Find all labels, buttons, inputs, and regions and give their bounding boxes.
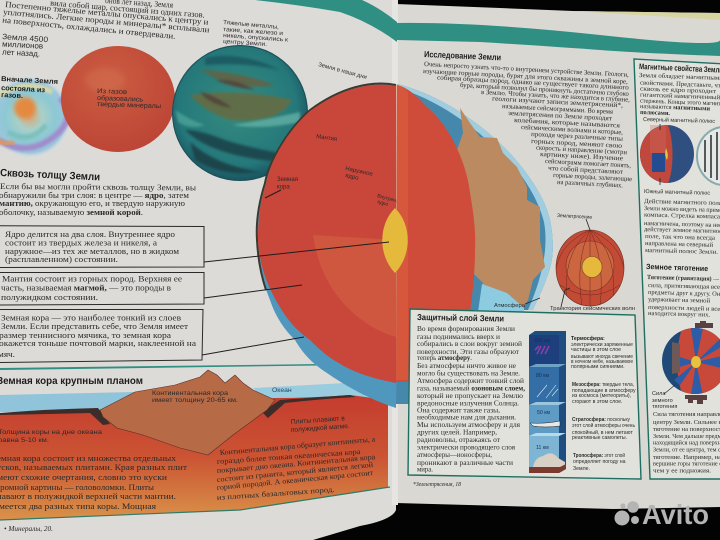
plates label: полужидкой магме. [291, 422, 350, 434]
mesosphere note: попадающие в атмосферу [572, 388, 636, 394]
airplane [530, 421, 560, 427]
panel text: радиоволны, отражаясь от [417, 435, 501, 444]
north pole label: Северный магнитный полюс [643, 116, 715, 125]
ocean crust label: Толщина коры на дне океана [0, 429, 102, 436]
gravity explanation text [653, 411, 720, 474]
light atmosphere rim [397, 84, 553, 310]
crust label: кора [277, 184, 290, 190]
paragraph: exploring the Earth: геологи изучают записи землетрясений*, [492, 96, 623, 109]
outer core label: ядро [345, 173, 360, 182]
gravity title: Земное тяготение [646, 262, 708, 273]
ground [529, 464, 566, 473]
nebula label: состояла из [1, 83, 46, 94]
earthquake label: Землетрясение [557, 213, 592, 221]
red mantle, left half [258, 85, 396, 383]
mantle lit sector [313, 235, 396, 337]
paragraph: three layers [0, 182, 196, 217]
paragraph: exploring the Earth: в Землю. Чтобы узнать, что же находится в глубине, [481, 89, 630, 104]
paragraph: exploring the Earth: Очень непросто узнать что-то о внутреннем устройстве Земли. Геологи, [424, 61, 629, 79]
stratosphere note: реактивные самолеты. [572, 435, 627, 441]
thermosphere note [571, 335, 633, 370]
gravity force label: тяготения [652, 404, 677, 410]
callout: mantle: Мантия состоит из горных пород. Верхняя ее [2, 274, 182, 284]
panel text: Без атмосферы ничто живое не [417, 361, 517, 370]
crust text: right column: из плотных базальтовых пород. [217, 485, 335, 502]
crust label: Земная [277, 177, 298, 183]
paragraph: exploring the Earth: проходя через различные типы [531, 131, 624, 143]
altitude labels: 50 км [537, 410, 550, 416]
green base line [0, 487, 390, 520]
paragraph: three layers: обнаружили бы три слоя: в центре — ядро, затем [0, 191, 190, 200]
caption: heavy metals: Тяжелые металлы, [223, 20, 279, 31]
intro text: top of left page: уплотнялись. Легкие породы и минералы* всплывали [3, 8, 210, 35]
mesosphere note [572, 381, 636, 405]
atmosphere column [529, 331, 566, 473]
crust text: right column: состоит из гранита, который является легкой [216, 460, 373, 484]
leader lines from callouts [202, 190, 389, 355]
callout: mantle [0, 272, 204, 305]
heading: through the Earth: Сквозь толщу Земли [0, 167, 100, 183]
gravity text: поверхности людей и все, [648, 304, 720, 313]
inner core [382, 208, 408, 273]
callout: crust: Земли. Если представить себе, что Земля имеет [1, 322, 188, 331]
thermosphere note: полярными сияниями. [571, 364, 625, 370]
troposphere note: определяет погоду на [573, 459, 626, 465]
panel: magnetism and gravity [634, 59, 720, 479]
panel text: газы поднимались вверх и [417, 332, 500, 341]
compass text: Действие магнитного поля [644, 198, 720, 207]
paragraph: exploring the Earth: сейсмограмм помогает понять, [545, 158, 631, 170]
panel text: атмосферы—ионосферы, [417, 450, 492, 459]
paragraph: exploring the Earth: называемые сейсмограммами. Во время [502, 103, 613, 116]
crust text: right column: покрывает дно океана. Континентальная кора [216, 452, 376, 475]
magnetism text: гигантский намагниченный [640, 92, 720, 101]
altitude labels: 11 км [536, 445, 549, 451]
continental crust label: Континентальная кора [152, 390, 228, 397]
plates label: Плиты плавают в [291, 415, 345, 426]
magnetism text: полюсами. [640, 109, 671, 117]
magnetism text: сквозь ее ядро проходит [640, 86, 716, 95]
altitude labels: 480 км [534, 338, 550, 344]
heading: exploring the Earth: Исследование Земли [424, 49, 501, 62]
caption: heavy metals: центру Земли. [223, 39, 268, 48]
nebula label: газов. [1, 90, 23, 100]
ocean shell, left half [257, 84, 396, 408]
meteors [537, 385, 558, 398]
dark rim edge [257, 84, 396, 290]
red interior, right half [396, 85, 475, 382]
compass text: направлена на северный [645, 240, 714, 249]
panel text: теперь атмосферу. [417, 353, 472, 362]
watermark: Avito: Avito [642, 499, 709, 530]
red planet label [97, 88, 161, 110]
callout: crust: Земная кора — это наиболее тонкий из слоев [1, 314, 181, 322]
gravity Earth diagram [662, 321, 720, 404]
thermosphere note: частицы в этом слое [571, 347, 621, 353]
gravity force label: земного [652, 398, 673, 404]
paragraph: exploring the Earth: картинку ниже). Изучение [540, 151, 623, 162]
panel title: Защитный слой Земли [417, 312, 504, 324]
compass text: магнитный полюс Земли. [645, 247, 719, 256]
troposphere note: Земле. [573, 466, 590, 472]
magma [0, 395, 388, 520]
callout: crust: размер теннисного мячика, то земная кора [0, 331, 171, 340]
callout: crust: окажется тоньше почтовой марки, наклеенной на [0, 339, 196, 348]
panel text: необходимые нам для дыхания. [417, 412, 516, 422]
magnetism text: свойствами. Представьте, что [640, 80, 720, 89]
stratosphere note: этот слой атмосферы очень [572, 422, 635, 429]
panel text: вредоносные излучения Солнца. [417, 398, 519, 408]
panel text: который не пропускает на Землю [417, 391, 523, 400]
gravity text: находится вокруг них. [648, 310, 711, 319]
panel: protective layer [408, 309, 641, 479]
clouds [533, 453, 565, 468]
magnet sphere diagram [697, 127, 720, 185]
magnetism text: Земля обладает магнитными [639, 72, 720, 82]
crust cross-section diagram [0, 370, 390, 520]
arrow: epicentre [586, 219, 590, 230]
paragraph: three layers: оболочку, называемую земной корой . [0, 208, 143, 217]
wave path label: Траектория сейсмических волн [550, 305, 635, 312]
stratosphere note [572, 416, 635, 441]
compass text: действует земное магнитное [644, 226, 720, 235]
gravity text [647, 274, 720, 319]
crust text: right column: горной породой. А океаническая кора состоит [216, 468, 374, 492]
gravity explanation text: чем у ее подножия. [653, 468, 711, 474]
panel text: мира. [417, 464, 433, 474]
altitude labels [534, 338, 550, 451]
paragraph: exploring the Earth: землетрясения по Земле проходят [508, 110, 612, 122]
arrow: wave path [561, 288, 570, 307]
paragraph: three layers: Если бы вы могли пройти сквозь толщу Земли, вы [0, 182, 196, 192]
continental crust mountain [100, 370, 275, 455]
caption: Earth 4500 million years ago: лет назад. [2, 48, 40, 58]
panel text: Мы используем атмосферу и для [417, 420, 520, 429]
continental crust label: имеет толщину 20-65 км. [152, 397, 238, 404]
shallow sea [478, 284, 524, 312]
callout: mantle: часть, называемая магмой, — это породы в [1, 284, 171, 292]
crust text: right column: гораздо более тонкая океаническая кора [217, 447, 361, 466]
troposphere note [573, 452, 626, 472]
magnetism text: называются магнитными [640, 103, 710, 112]
callout: mantle: полужидком состоянии. [1, 293, 98, 302]
oceanic crust dark band [0, 408, 110, 425]
paragraph: exploring the Earth: сейсмическими волнами и которые, [521, 124, 623, 136]
gravity force label [652, 385, 677, 410]
atmosphere label and leader: Атмосфера [494, 303, 526, 309]
altitude labels: 80 км [536, 373, 549, 379]
callout: core: (расплавленном) состоянии. [5, 255, 118, 264]
inner core label: Внутрен. [376, 193, 398, 204]
crust text: right column: Континентальная кора образует континенты, а [219, 434, 376, 457]
callout: core: состоит из твердых железа и никеля, а [5, 238, 157, 248]
paragraph: exploring the Earth: что собой представляют [548, 165, 623, 176]
thermosphere note: Термосфера: [571, 335, 605, 342]
plates label [291, 415, 350, 434]
mesosphere note: из космоса (метеориты), [572, 393, 631, 399]
compass text: компаса. Стрелка компаса [644, 212, 720, 220]
gravity text: Тяготение (гравитация) — [647, 274, 720, 283]
paragraph: exploring the Earth: горные породы, залегающие [553, 172, 632, 183]
ocean label: Океан [272, 387, 292, 394]
panel text [417, 324, 525, 474]
magnetised Earth diagram [640, 124, 694, 185]
red planet label: образовались [97, 94, 144, 104]
paragraph: exploring the Earth: колебания, которые называются [514, 117, 620, 130]
caption: Earth today: Земля в наши дни [317, 62, 367, 81]
magnetism text [639, 72, 720, 117]
intro text: top of left page [2, 0, 210, 41]
red planet label: твердые минералы [97, 101, 161, 110]
caption: heavy metals: никель, опускались к [223, 33, 289, 44]
red planet label: Из газов [97, 88, 128, 96]
seismic wave diagram [550, 213, 635, 312]
paragraph: exploring the Earth: собирая образцы пород, однако не существует такого длинного [437, 75, 630, 92]
ocean [0, 392, 135, 412]
watermark: Avito [614, 499, 709, 530]
large globe cutaway [257, 84, 553, 408]
crust text: left column [0, 454, 187, 511]
panel text: Атмосфера содержит тонкий слой [417, 376, 524, 385]
paragraph: exploring the Earth: изучающие горные породы, бурят для этого скважины в земной коре, [423, 68, 628, 86]
inner core label: ядро [376, 199, 389, 208]
page reference: right: *Землетрясения, 18 [413, 481, 462, 488]
ocean shell, right half [396, 84, 553, 404]
panel text: Во время формирования Земли [417, 324, 515, 333]
gravity text: сила, притягивающая все [648, 282, 720, 291]
teal band: right page [397, 23, 720, 56]
paragraph: exploring the Earth: горных пород, меняют свою [531, 138, 622, 150]
outer core label: Наружное [345, 166, 374, 178]
paragraph: three layers: мантию, окружающую его, и твердую наружную [0, 199, 185, 208]
caption: Earth 4500 million years ago [2, 32, 49, 58]
thermosphere note: в ночном небе, называемое [571, 359, 633, 365]
intro text: top of left page: на поверхность, охлаждались и отвердевали. [2, 16, 176, 41]
caption: heavy metals [223, 20, 289, 48]
illustration: red planet [61, 46, 175, 152]
paragraph: exploring the Earth: на различных глубинах. [557, 179, 623, 189]
panel text: электрически проводящего слоя [417, 442, 515, 452]
callout: core: наружное—из тех же металлов, но в жидком [5, 247, 180, 256]
caption: Earth 4500 million years ago: Земля 4500 [2, 32, 49, 44]
paragraph: exploring the Earth: бура, который позволил бы проникнуть достаточно глубоко [460, 82, 630, 98]
caption: Earth 4500 million years ago: миллионов [2, 40, 43, 51]
aurora [535, 346, 549, 354]
callout: core: Ядро делится на два слоя. Внутреннее ядро [5, 230, 175, 239]
panel text: Она содержит также газы, [417, 406, 500, 414]
crust label [277, 177, 298, 190]
mesosphere note: сгорают в этом слое. [572, 399, 622, 405]
page reference: left: • Минералы, 20. [4, 524, 53, 533]
caption: heavy metals: такие, как железо и [223, 27, 283, 37]
stratosphere note: спокойный, в нем летают [572, 429, 633, 436]
teal band: left page [255, 0, 397, 42]
illustration: green planet [172, 45, 308, 181]
nebula label: Вначале Земля [1, 74, 58, 86]
crust text: right column [216, 434, 376, 502]
paragraph: exploring the Earth: скорость и направление (смотри [536, 145, 627, 156]
gravity explanation text: тяготение. Например, на [653, 454, 720, 461]
intro text: top of left page: Постепенно тяжелые металлы опускались к центру и [5, 0, 209, 27]
gravity text: удерживает на земной [648, 296, 711, 305]
illustration: gas nebula [0, 74, 72, 159]
panel text: собирались в слои вокруг земной [417, 339, 522, 348]
heading: crust close-up: Земная кора крупным планом [0, 376, 143, 387]
continental crust label [152, 390, 238, 404]
mesosphere note: Мезосфера: твердые тела, [572, 381, 634, 388]
stratosphere note: Стратосфера: поскольку [572, 416, 630, 423]
right-half lit zone [396, 85, 408, 380]
panel text: могло бы существовать на Земле. [417, 368, 520, 378]
divider band [0, 364, 320, 370]
panel text: других целей. Например, [417, 428, 497, 436]
mantle label: Мантия [316, 134, 337, 143]
thermosphere note: электрически заряженные [571, 342, 633, 348]
paragraph: exploring the Earth [423, 61, 632, 189]
callout: core [0, 226, 204, 268]
panel text: газа, называемый озоновым слоем, [417, 384, 525, 392]
panel text: поверхности. Эти газы образуют [417, 347, 520, 356]
thermosphere note: вызывают иногда свечение [571, 354, 633, 360]
atmosphere label and leader [494, 298, 540, 309]
continent [457, 108, 545, 310]
gravity force label: Сила [652, 391, 666, 397]
troposphere note: Тропосфера: этот слой [573, 452, 625, 459]
nebula label [1, 74, 58, 100]
ocean crust label [0, 429, 102, 444]
callout: crust [0, 310, 203, 362]
compass text: поле, так что она всегда [645, 233, 715, 242]
compass text [644, 198, 720, 256]
south pole label: Южный магнитный полюс [644, 188, 710, 197]
panel text: проникают в различные части [417, 458, 513, 467]
